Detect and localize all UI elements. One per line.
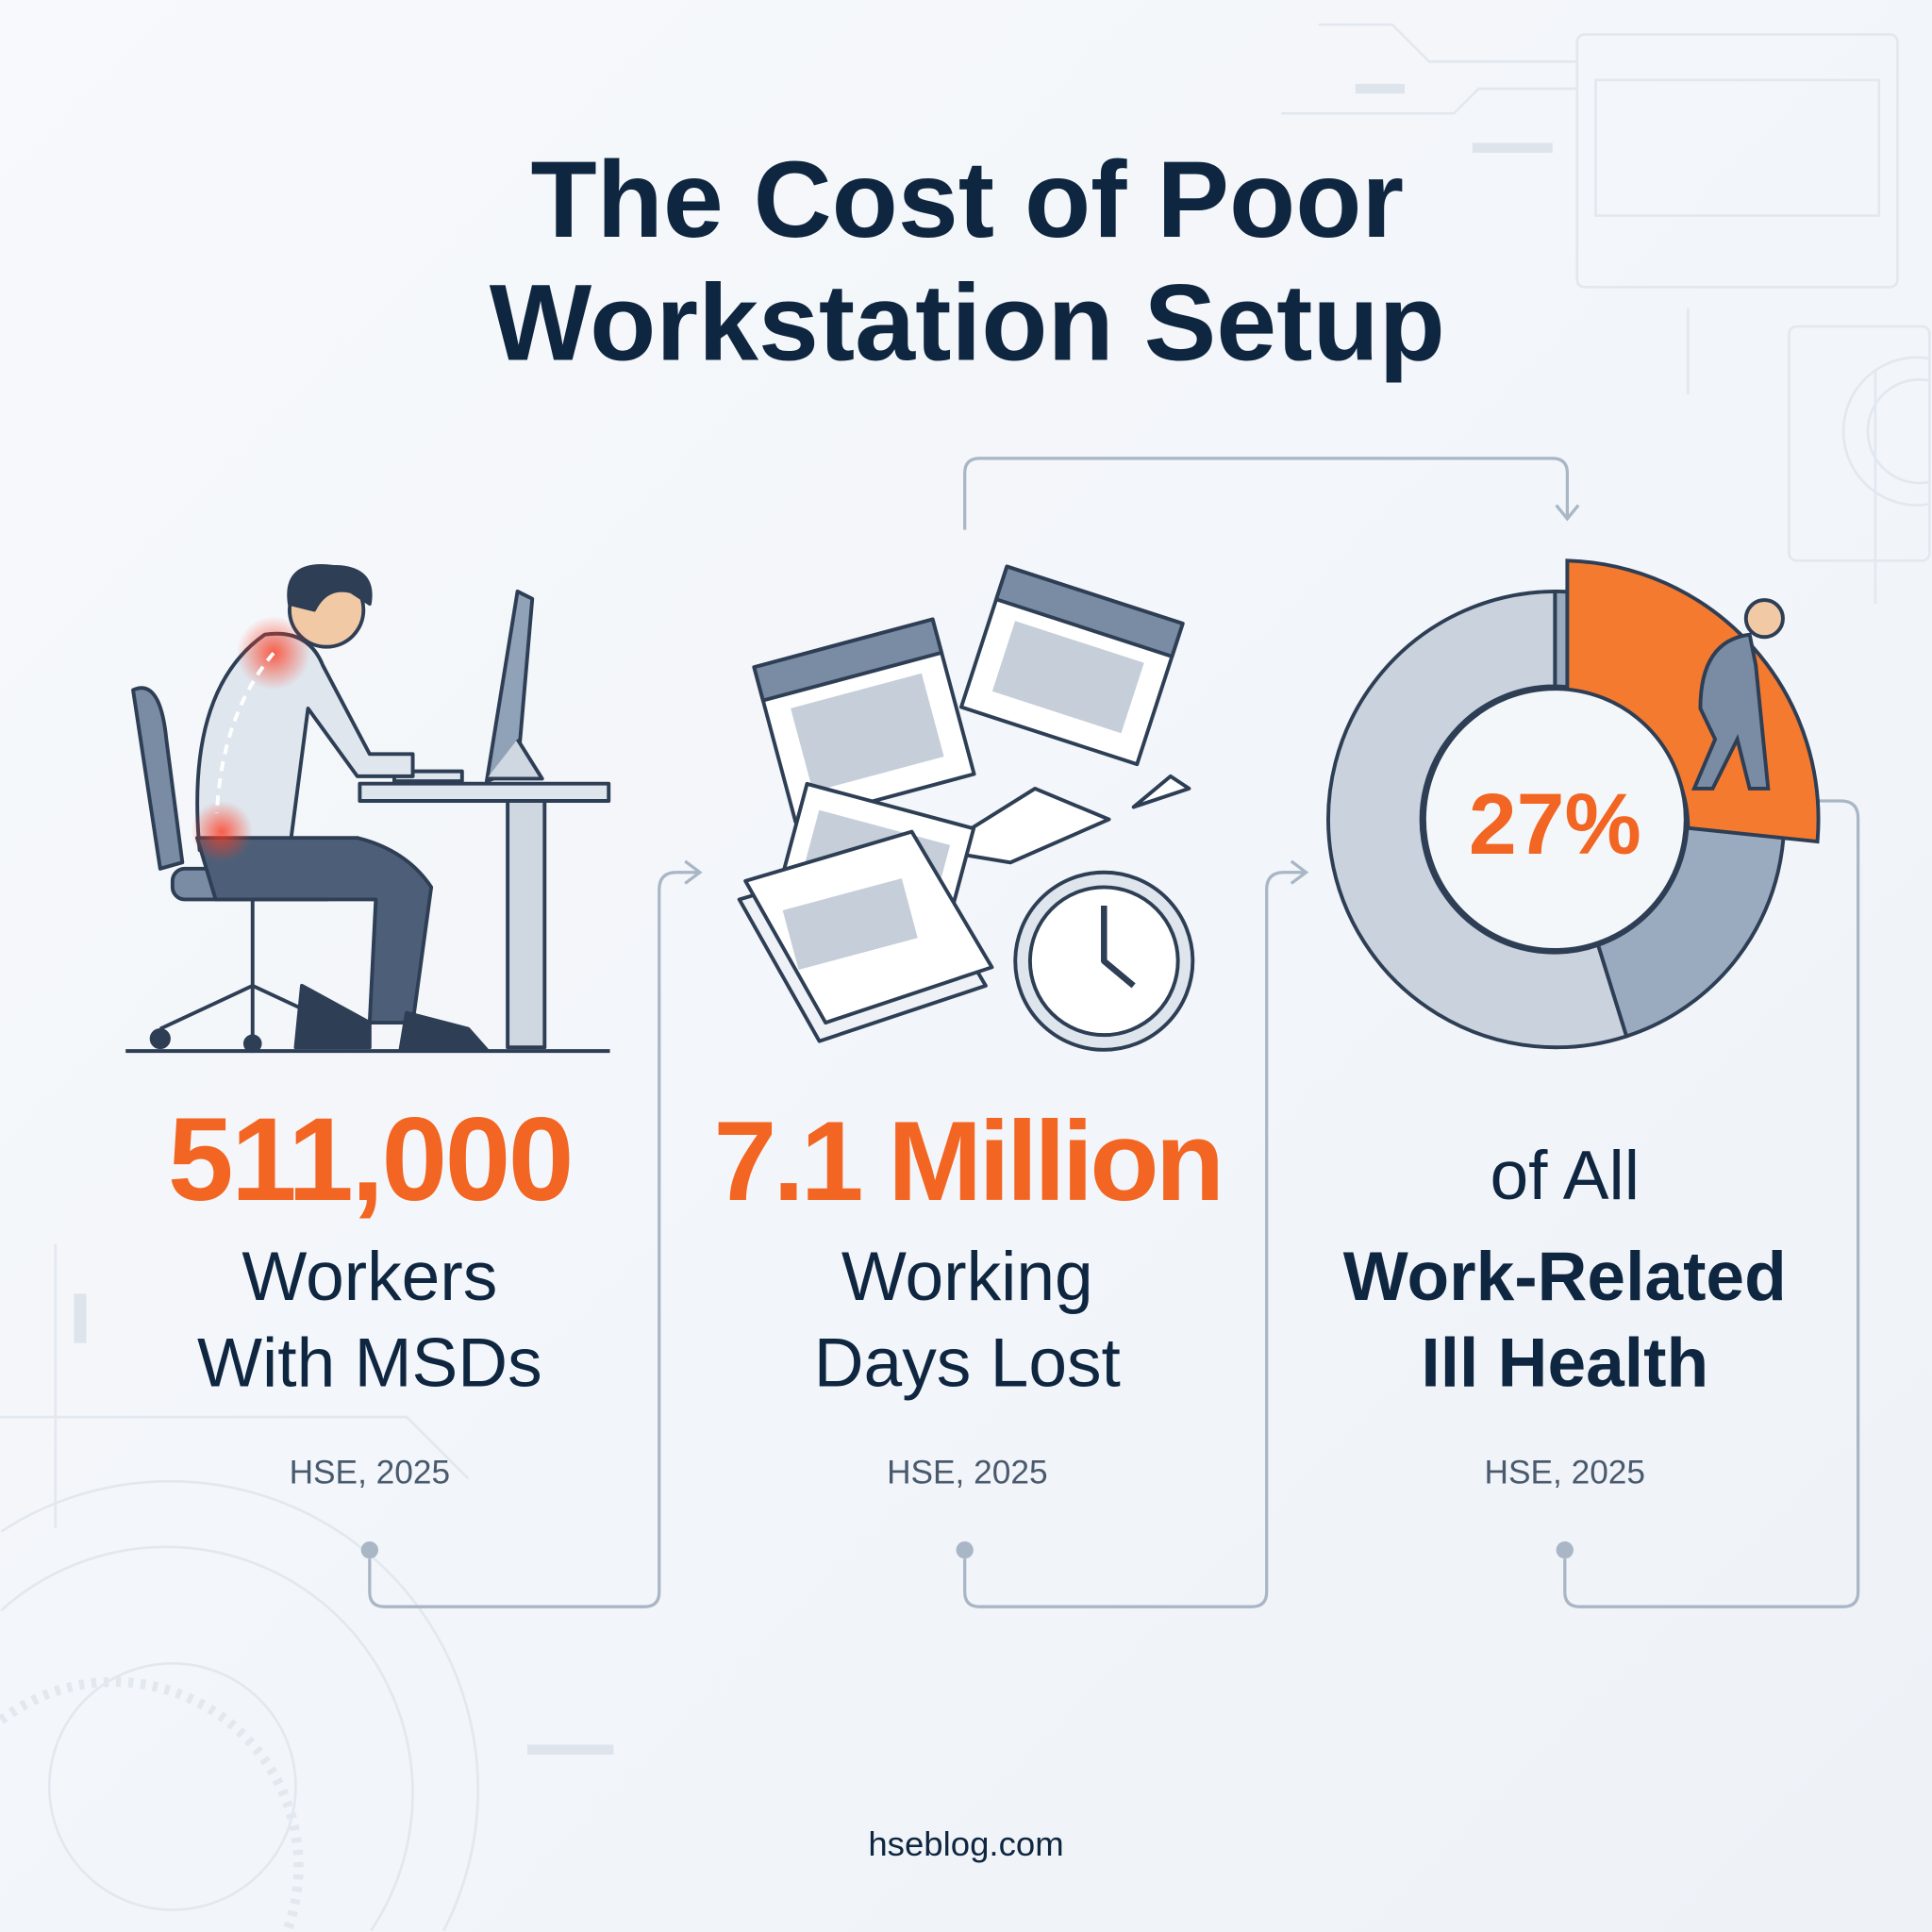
- stat: 511,000: With MSDs: [197, 1324, 542, 1401]
- stat: 511,000: HSE, 2025: [290, 1455, 450, 1491]
- stat: 511,000: Workers: [242, 1239, 497, 1315]
- donut chart 27%: 27%: [1469, 776, 1641, 873]
- connector arrows: [370, 458, 1858, 1607]
- stat: 511,000: [168, 1092, 572, 1491]
- stat: 27% of all: Ill Health: [1421, 1324, 1708, 1401]
- stat: 27% of all: of All: [1491, 1138, 1640, 1214]
- icon: calendars and clock: [740, 567, 1192, 1050]
- title: [490, 140, 1445, 383]
- stat: 7.1 Million: Days Lost: [814, 1324, 1121, 1401]
- donut chart 27%: [1328, 560, 1819, 1047]
- title: The Cost of Poor: [530, 140, 1404, 260]
- icon: person at desk: [125, 566, 610, 1051]
- stat: 7.1 Million: 7.1 Million: [713, 1098, 1221, 1224]
- footer source: hseblog.com: [868, 1824, 1064, 1863]
- stat: 7.1 Million: HSE, 2025: [887, 1455, 1048, 1491]
- stat: 7.1 Million: [713, 1098, 1221, 1491]
- stat: 27% of all: Work-Related: [1343, 1239, 1787, 1315]
- stat: 27% of all: [1343, 1138, 1787, 1491]
- stat: 7.1 Million: Working: [841, 1239, 1093, 1315]
- title: Workstation Setup: [490, 262, 1445, 383]
- stat: 511,000: 511,000: [168, 1092, 572, 1225]
- stat: 27% of all: HSE, 2025: [1485, 1455, 1645, 1491]
